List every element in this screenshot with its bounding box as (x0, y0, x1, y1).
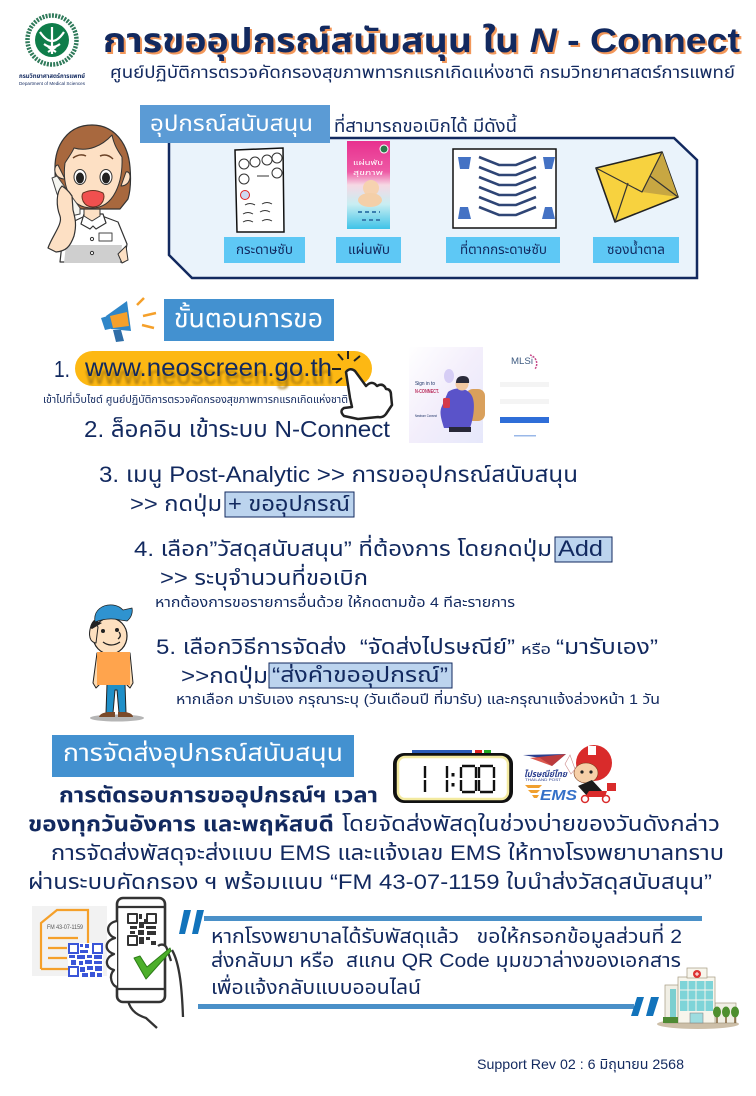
icon: brown envelope (596, 152, 678, 222)
step 3: >> กดปุ่ม (130, 493, 222, 517)
delivery schedule text: การจัดส่งพัสดุจะส่งแบบ EMS และแจ้งเลข EMS ให้ทางโรงพยาบาลทราบ (51, 841, 724, 866)
subtitle: ศูนย์ปฏิบัติการตรวจคัดกรองสุขภาพทารกแรกเกิดแห่งชาติ กรมวิทยาศาสตร์การแพทย์ (110, 63, 735, 84)
label: paper (224, 237, 305, 263)
icon: phone scanning QR (107, 898, 183, 1028)
footer: revision: Support Rev 02 : 6 มิถุนายน 2568 (477, 1056, 684, 1073)
panel: supplies (169, 138, 697, 278)
step 4: >> ระบุจำนวนที่ขอเบิก (160, 563, 368, 591)
step 5: 5. เลือกวิธีการจัดส่ง “จัดส่งไปรษณีย์” (156, 635, 515, 659)
callout: return info: เพื่อแจ้งกลับแบบออนไลน์ (211, 974, 421, 999)
callout: return info: หากโรงพยาบาลได้รับพัสดุแล้ว ขอให้กรอกข้อมูลส่วนที่ 2 (211, 923, 682, 949)
title: การขออุปกรณ์สนับสนุน ใน N - Connect (103, 22, 740, 61)
icon: brochure (347, 141, 390, 229)
heading: supplies: อุปกรณ์สนับสนุน (150, 111, 313, 137)
login screenshot: Sign in to (415, 381, 435, 387)
delivery schedule text (28, 784, 724, 895)
step 3 (99, 462, 578, 517)
delivery schedule text: โดยจัดส่งพัสดุในช่วงบ่ายของวันดังกล่าว (342, 812, 720, 837)
step 5: >>กดปุ่ม (181, 665, 268, 689)
icon: brochure: สุขภาพ (353, 170, 383, 178)
icon: hospital (657, 968, 739, 1029)
text: website note: เข้าไปที่เว็บไซต์ ศูนย์ปฏิบัติการตรวจคัดกรองสุขภาพทารกแรกเกิดแห่งชาติ (43, 391, 348, 406)
title: การขออุปกรณ์สนับสนุน ใน N - Connect (105, 24, 742, 63)
icon: megaphone (101, 298, 156, 342)
step 4: 4. เลือก”วัสดุสนับสนุน” ที่ต้องการ โดยกดปุ่ม (134, 534, 552, 562)
icon: nurse on phone (48, 125, 131, 263)
heading: steps: ขั้นตอนการขอ (174, 301, 323, 333)
step 5 (156, 635, 660, 708)
closing quote (631, 997, 659, 1016)
step 5: หรือ (521, 641, 551, 657)
icon: drying rack (453, 149, 556, 228)
delivery schedule text: ผ่านระบบคัดกรอง ฯ พร้อมแนบ “FM 43-07-1159 ใบนำส่งวัสดุสนับสนุน” (28, 870, 712, 895)
button: add supplies: + ขออุปกรณ์ (228, 493, 350, 517)
icon: brochure: แผ่นพับ (353, 158, 383, 167)
step 4 (134, 534, 612, 610)
icon: pointing hand (332, 351, 392, 419)
url pill (75, 351, 372, 390)
icon: Thailand Post EMS: EMS (540, 787, 577, 804)
icon: filter paper (235, 148, 284, 232)
text: available: ที่สามารถขอเบิกได้ มีดังนี้ (334, 113, 517, 136)
button: Add: Add (558, 536, 603, 561)
label: brochure: แผ่นพับ (348, 241, 390, 257)
icon: delivery man (90, 605, 144, 722)
icon: digital clock (393, 750, 513, 803)
icon: Thailand Post EMS: ไปรษณีย์ไทย (524, 769, 568, 779)
button: Add (555, 536, 612, 562)
callout: return info: ส่งกลับมา หรือ สแกน QR Code มุมขวาล่างของเอกสาร (211, 949, 681, 972)
heading: delivery: การจัดส่งอุปกรณ์สนับสนุน (63, 739, 343, 768)
heading: delivery (52, 735, 354, 777)
login screenshot (409, 347, 549, 443)
logo: Department of Medical Sciences: Department of Medical Sciences (19, 81, 86, 86)
label: envelope (593, 237, 679, 263)
step 5: “มารับเอง” (556, 636, 658, 659)
delivery schedule text: การตัดรอบการขออุปกรณ์ฯ เวลา (59, 784, 378, 808)
url pill: www.neoscreen.go.th (84, 354, 332, 382)
step 5: หากเลือก มารับเอง กรุณาระบุ (วันเดือนปี ที่มารับ) และกรุณาแจ้งล่วงหน้า 1 วัน (176, 689, 660, 708)
icon: form with QR code: FM 43-07-1159 (47, 925, 84, 931)
label: brochure (336, 237, 401, 263)
step 1 (54, 351, 372, 390)
delivery schedule text: ของทุกวันอังคาร และพฤหัสบดี (28, 813, 334, 837)
step 3: 3. เมนู Post-Analytic >> การขออุปกรณ์สนับสนุน (99, 462, 578, 488)
label: envelope: ซองน้ำตาล (607, 240, 665, 257)
label: rack: ที่ตากกระดาษซับ (460, 240, 547, 257)
opening quote (179, 910, 204, 934)
icon: Thailand Post EMS: THAILAND POST (525, 777, 562, 782)
button: send request: “ส่งคำขออุปกรณ์” (272, 663, 448, 688)
url pill: www.neoscreen.go.th (85, 362, 333, 390)
heading: supplies (140, 105, 330, 143)
step 4: หากต้องการขอรายการอื่นด้วย ให้กดตามข้อ 4 ทีละรายการ (155, 592, 515, 610)
callout: return info (179, 910, 702, 1016)
step 2: 2. ล็อคอิน เข้าระบบ N-Connect (84, 416, 391, 442)
heading: steps (164, 299, 334, 341)
logo: Department of Medical Sciences (19, 16, 86, 86)
label: rack (446, 237, 560, 263)
login screenshot: N-CONNECT. (415, 389, 439, 395)
label: paper: กระดาษซับ (236, 242, 293, 257)
step 1: 1. (54, 356, 70, 382)
icon: form with QR code (32, 906, 107, 977)
icon: Thailand Post EMS (523, 745, 616, 804)
login screenshot: Newborn Connect (415, 413, 438, 418)
logo: Department of Medical Sciences: กรมวิทยาศาสตร์การแพทย์ (19, 74, 85, 80)
login screenshot: MLSi (511, 356, 533, 367)
